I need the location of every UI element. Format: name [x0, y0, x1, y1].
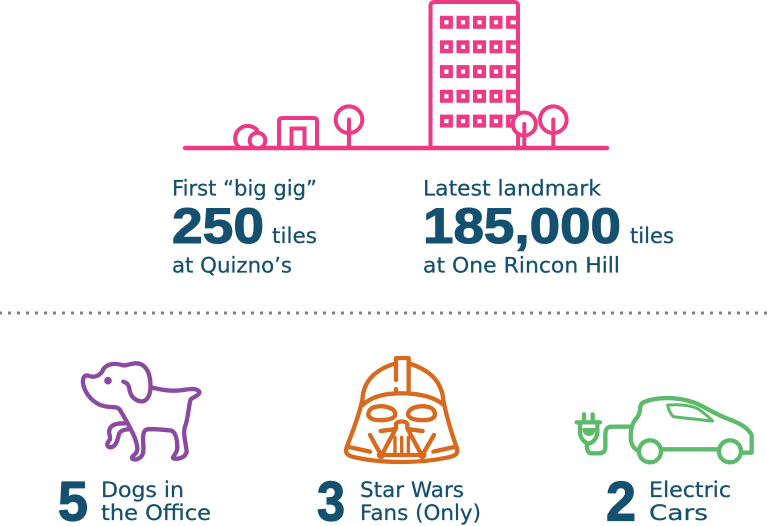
stat: dogs in the office	[58, 470, 211, 526]
icon: tree	[336, 106, 362, 147]
ground line	[185, 146, 607, 150]
stat: first big gig: tiles	[272, 224, 317, 249]
stat: first big gig: at Quizno’s	[172, 254, 292, 278]
icon: bush	[235, 126, 265, 148]
illustration: skyline from small shop to tall tower	[185, 2, 607, 148]
plug	[584, 414, 593, 421]
icon: small shop	[279, 118, 317, 147]
car window	[668, 405, 713, 421]
stat: latest landmark	[423, 176, 674, 278]
stat: Star Wars fans: Star Wars	[360, 478, 464, 503]
stat: Star Wars fans	[317, 470, 481, 526]
stat: latest landmark: tiles	[630, 224, 674, 249]
icon: tree right of the building	[540, 106, 567, 147]
stat: first big gig: 250	[172, 198, 264, 254]
stat: first big gig	[172, 176, 317, 278]
icon: small tree by the building	[513, 112, 536, 147]
car wheels	[639, 440, 661, 462]
icon: dog	[83, 363, 199, 459]
stat: latest landmark: Latest landmark	[423, 176, 602, 202]
stat: latest landmark: at One Rincon Hill	[423, 254, 620, 278]
stat: electric cars: Electric	[649, 478, 731, 503]
stat: electric cars: Cars	[649, 501, 708, 526]
building windows	[442, 18, 518, 125]
charging cable	[587, 427, 631, 453]
stat: dogs in the office: Dogs in	[101, 478, 184, 503]
stat: Star Wars fans: Fans (Only)	[360, 501, 481, 526]
icon: Darth Vader helmet	[346, 358, 457, 462]
icon: tall building	[430, 2, 518, 147]
stat: dogs in the office: the Office	[101, 501, 211, 526]
stat: latest landmark: 185,000	[423, 198, 621, 254]
stat: first big gig: First “big gig”	[172, 176, 317, 202]
icon: electric car with plug	[577, 398, 752, 462]
stat: electric cars	[606, 470, 731, 526]
car body	[631, 398, 752, 453]
